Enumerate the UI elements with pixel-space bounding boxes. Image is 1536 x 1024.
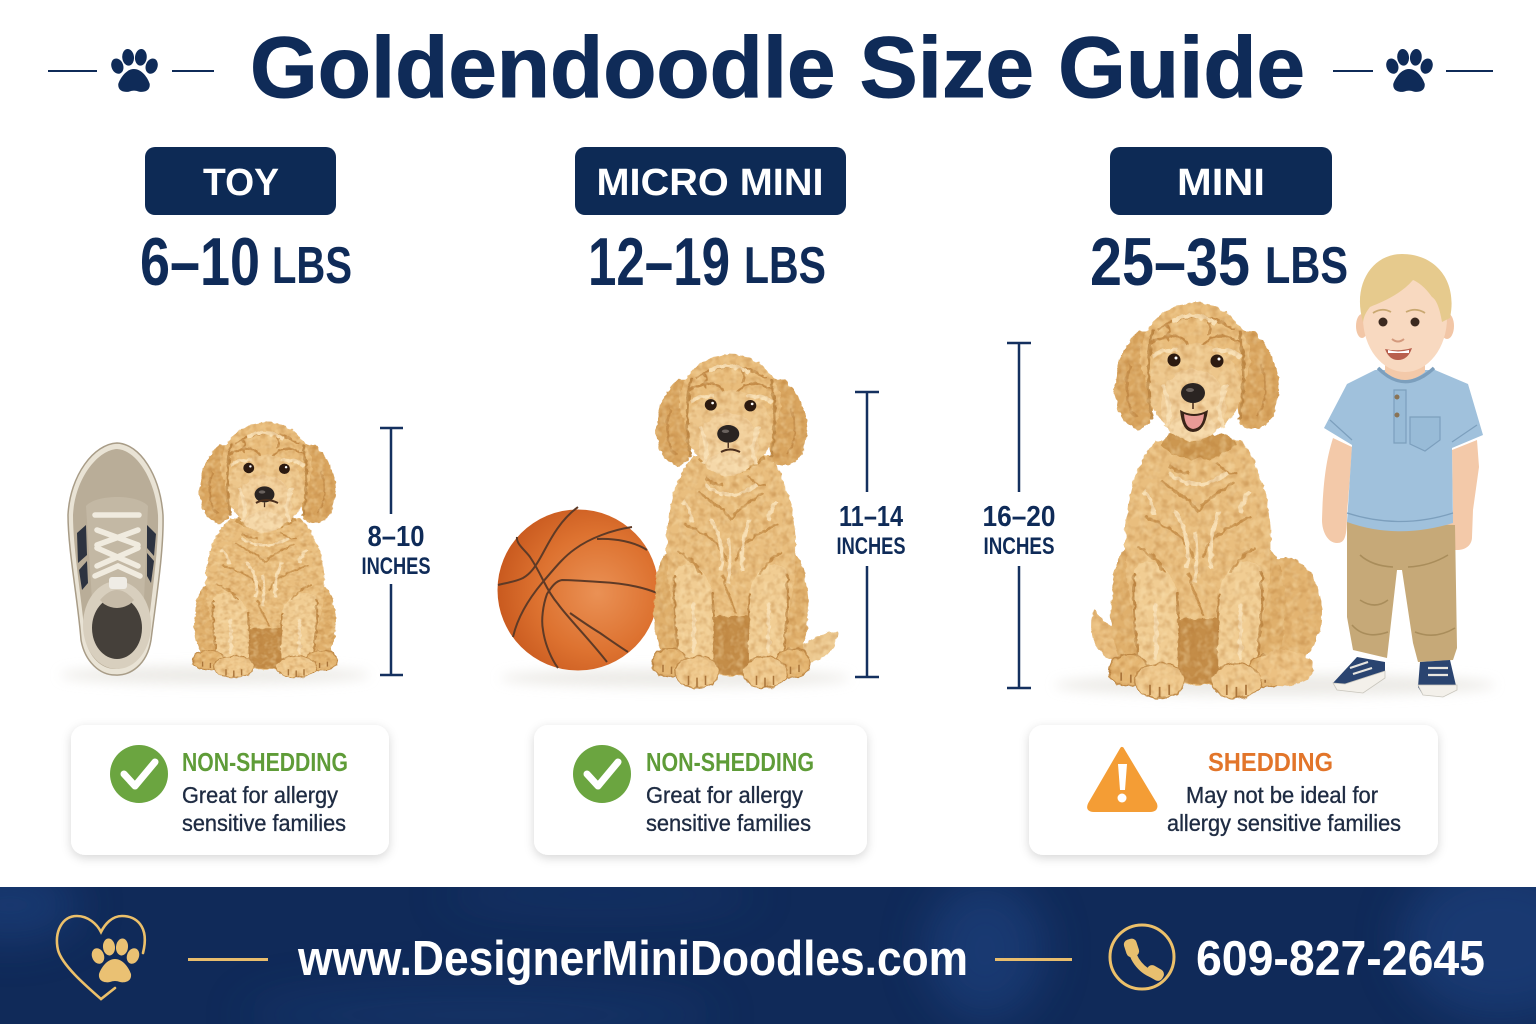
height label: mini: 16–20 (982, 501, 1056, 533)
illustration: basketball (498, 507, 658, 670)
micro mini label: MICRO MINI (596, 162, 824, 204)
height label: mini (982, 501, 1056, 560)
mini weight: 25–35 (1090, 224, 1250, 300)
toy label (145, 147, 336, 215)
toy label: TOY (203, 162, 279, 204)
micro mini weight: LBS (744, 237, 826, 295)
ground shadow (500, 669, 850, 687)
title: Goldendoodle Size Guide (250, 20, 1305, 116)
height label: micro mini: INCHES (836, 533, 906, 560)
illustration: toddler (1322, 254, 1483, 697)
icon: left paw ornament (48, 48, 214, 92)
height marker: toy (380, 428, 403, 675)
height label: mini: INCHES (984, 533, 1054, 560)
callout: toy non-shedding: sensitive families (182, 810, 346, 836)
micro mini label (575, 147, 846, 215)
footer band (0, 860, 1536, 1024)
callout: mini shedding: allergy sensitive families (1167, 810, 1401, 836)
callout: micro mini non-shedding (534, 725, 867, 855)
callout: mini shedding (1029, 725, 1438, 855)
illustration: toy dog (192, 422, 338, 677)
mini label: MINI (1177, 162, 1265, 204)
icon: phone (1110, 925, 1174, 989)
icon: heart with paw (57, 916, 145, 999)
height marker: mini (1007, 343, 1031, 688)
callout: toy non-shedding (71, 725, 389, 855)
callout: micro mini non-shedding: Great for allergy (646, 782, 803, 808)
height label: micro mini: 11–14 (839, 501, 903, 533)
ground shadow (1055, 674, 1495, 696)
icon: right paw ornament (1333, 48, 1493, 92)
illustration: mini dog (1091, 303, 1322, 698)
divider (188, 958, 268, 961)
illustration: shoe (68, 443, 163, 675)
mini label (1110, 147, 1332, 215)
callout: mini shedding: SHEDDING (1208, 747, 1333, 777)
panel: toy (60, 147, 430, 855)
panel: mini (982, 147, 1495, 855)
height label: micro mini (836, 501, 906, 560)
ground shadow (60, 666, 370, 684)
callout: mini shedding: May not be ideal for (1186, 782, 1378, 808)
callout: toy non-shedding: Great for allergy (182, 782, 338, 808)
callout: micro mini non-shedding: NON-SHEDDING (646, 747, 814, 777)
height label: toy (362, 521, 430, 580)
website: www.DesignerMiniDoodles.com (297, 932, 968, 986)
phone number: 609-827-2645 (1196, 932, 1485, 986)
mini weight: LBS (1265, 237, 1348, 295)
toy weight: LBS (272, 237, 352, 295)
height marker: micro mini (855, 392, 879, 677)
height label: toy: INCHES (362, 553, 430, 580)
callout: toy non-shedding: NON-SHEDDING (182, 747, 348, 777)
divider (995, 958, 1072, 961)
micro mini weight: 12–19 (588, 224, 730, 300)
illustration: micro mini dog (652, 355, 838, 688)
height label: toy: 8–10 (368, 521, 424, 553)
callout: micro mini non-shedding: sensitive families (646, 810, 811, 836)
panel: micro mini (498, 147, 906, 855)
toy weight: 6–10 (140, 224, 260, 300)
